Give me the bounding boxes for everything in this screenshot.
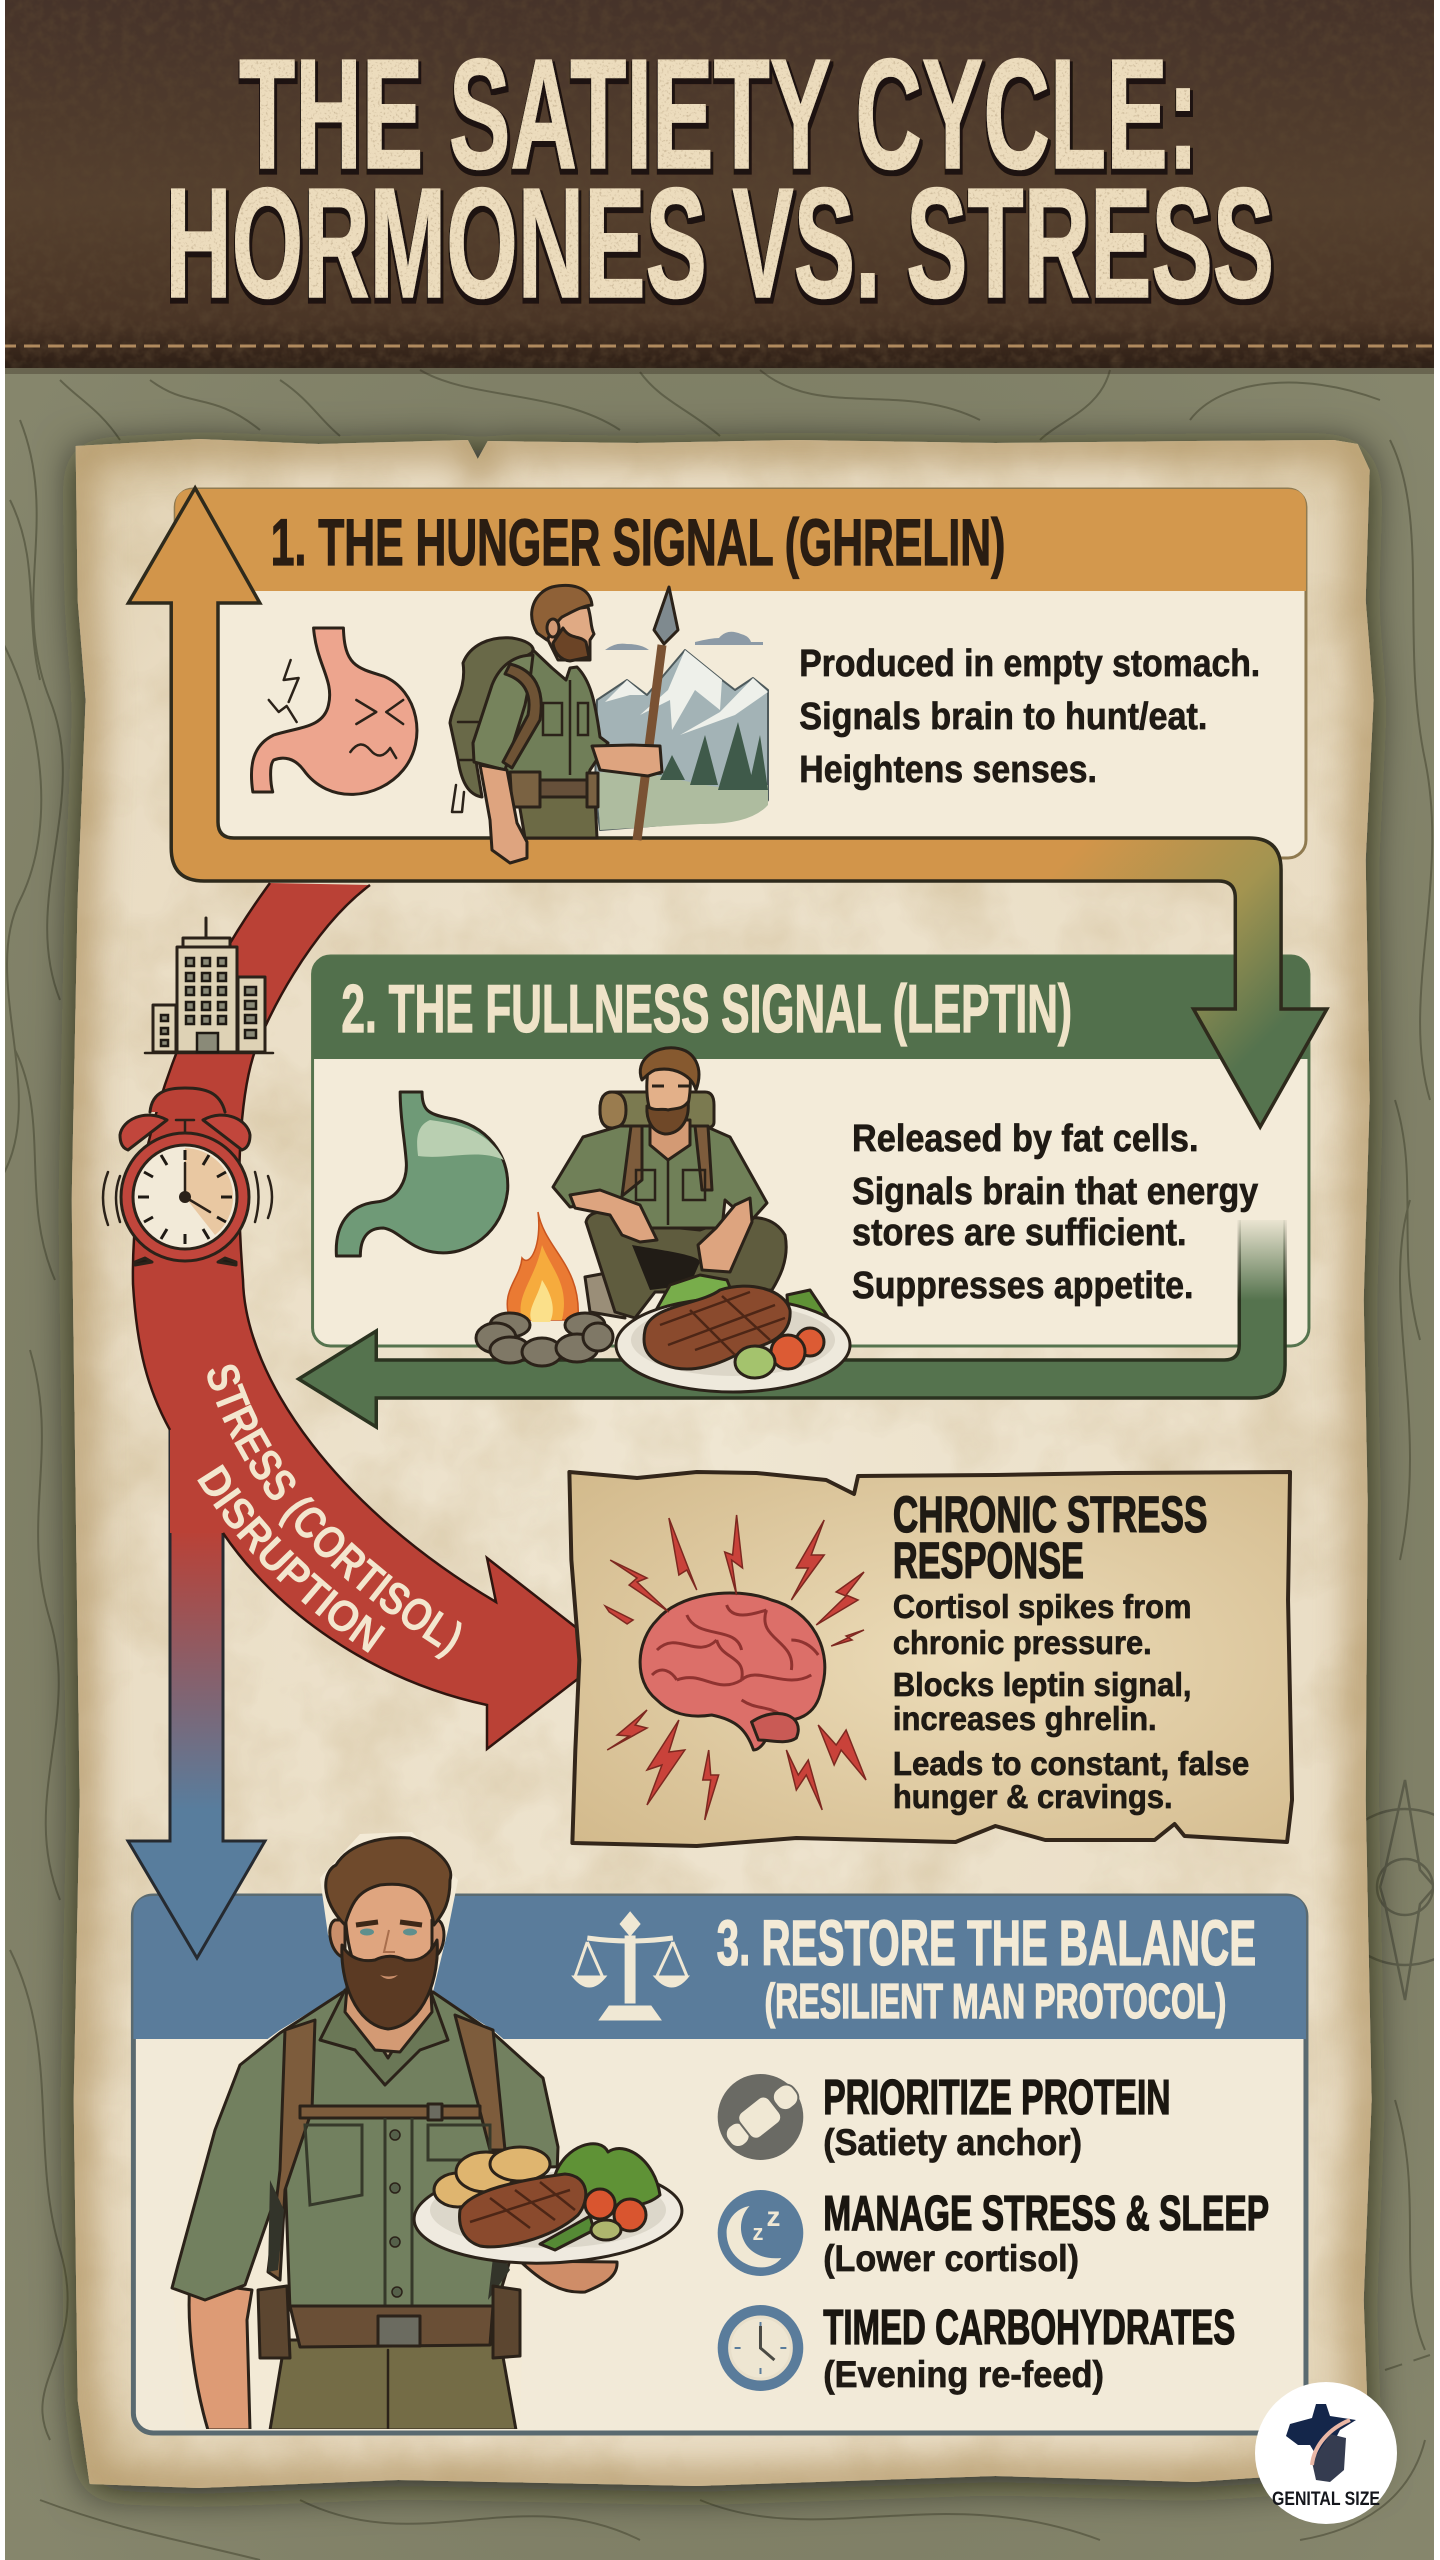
right forearm and hand bbox=[592, 745, 662, 776]
icon: ringing alarm clock bbox=[103, 1088, 272, 1265]
sleeve bbox=[473, 655, 533, 770]
neck and tee bbox=[650, 1120, 690, 1160]
head bbox=[647, 1060, 690, 1132]
rock seat bbox=[585, 1272, 625, 1318]
icon: full green stomach bbox=[336, 1092, 508, 1256]
trousers bbox=[270, 2340, 516, 2430]
body text: stress effects: increases ghrelin. bbox=[893, 1700, 1157, 1737]
hand under plate bbox=[520, 2261, 617, 2292]
icon: moon and sleep: z bbox=[766, 2201, 780, 2232]
trousers bbox=[586, 1212, 786, 1318]
icon: plate of steak by the fire bbox=[616, 1275, 850, 1392]
icon: protein bbox=[718, 2074, 805, 2160]
heading 3 bbox=[717, 1907, 1256, 2029]
trousers bbox=[518, 797, 597, 838]
spear bbox=[637, 645, 662, 840]
eyes bbox=[356, 1922, 422, 1925]
icon: balance scales bbox=[574, 1912, 687, 2020]
header: leather band bbox=[0, 0, 1440, 374]
body text 1 bbox=[799, 643, 1260, 791]
arrow: hunger to fullness loop (orange to green) bbox=[128, 488, 1327, 1127]
heading: chronic stress response: RESPONSE bbox=[893, 1532, 1084, 1589]
title bbox=[165, 27, 1274, 331]
body text 2: Signals brain that energy bbox=[852, 1171, 1258, 1213]
body text: stress effects: chronic pressure. bbox=[893, 1624, 1152, 1661]
illustration: hunter with spear bbox=[450, 585, 678, 863]
body text 2: Released by fat cells. bbox=[852, 1118, 1198, 1160]
salad greens bbox=[555, 2144, 660, 2206]
item: prioritize protein: (Satiety anchor) bbox=[823, 2122, 1082, 2163]
collar and tee bbox=[345, 2035, 423, 2075]
item: timed carbohydrates: TIMED CARBOHYDRATES bbox=[823, 2301, 1235, 2355]
panel: aged parchment sheet bbox=[60, 430, 1384, 2500]
body text 1: Signals brain to hunt/eat. bbox=[799, 696, 1207, 738]
body text 2: stores are sufficient. bbox=[852, 1212, 1187, 1254]
belt and pouches bbox=[510, 780, 597, 797]
panel 2 header band bbox=[313, 956, 1309, 1059]
heading 1: 1. THE HUNGER SIGNAL (GHRELIN) bbox=[271, 505, 1005, 579]
beard bbox=[342, 1940, 437, 2029]
steak bbox=[460, 2174, 586, 2247]
heading: chronic stress response bbox=[893, 1486, 1207, 1589]
badge: genital size logo bbox=[1255, 2382, 1397, 2524]
illustration: man holding plate of food bbox=[172, 1832, 684, 2430]
icon: campfire bbox=[476, 1212, 613, 1366]
shirt bbox=[553, 1126, 767, 1228]
head bbox=[548, 607, 594, 660]
ears bbox=[330, 1920, 444, 1958]
panel: chronic stress response note bbox=[569, 1472, 1292, 1846]
panel 3 header band bbox=[133, 1896, 1306, 2039]
bedroll bbox=[600, 1092, 714, 1128]
plate bbox=[412, 2162, 684, 2268]
backpack bbox=[450, 638, 533, 797]
body text 1: Produced in empty stomach. bbox=[799, 643, 1260, 685]
left forearm and hand bbox=[480, 765, 527, 863]
compass rose remnant bbox=[1327, 1780, 1440, 2000]
icon: torso silhouette bbox=[1286, 2404, 1356, 2482]
potatoes bbox=[434, 2147, 550, 2207]
pouches bbox=[258, 2286, 520, 2358]
dark shirt folds bbox=[268, 2180, 510, 2300]
body text 2 bbox=[852, 1118, 1258, 1307]
body text 2: Suppresses appetite. bbox=[852, 1265, 1193, 1307]
belt bbox=[290, 2306, 493, 2347]
hair bbox=[326, 1838, 451, 1925]
body text: stress effects bbox=[893, 1588, 1249, 1815]
item: timed carbohydrates bbox=[823, 2301, 1235, 2395]
icon: stressed brain bbox=[640, 1593, 825, 1750]
head bbox=[345, 1878, 436, 2000]
arrow: red stress disruption curve bbox=[133, 883, 610, 1749]
item: timed carbohydrates: (Evening re-feed) bbox=[823, 2354, 1104, 2395]
heading: chronic stress response: CHRONIC STRESS bbox=[893, 1486, 1207, 1543]
body text: stress effects: hunger & cravings. bbox=[893, 1778, 1173, 1815]
item: manage stress and sleep bbox=[823, 2187, 1269, 2279]
label: stress cortisol disruption: DISRUPTION bbox=[197, 1464, 386, 1653]
body text: stress effects: Blocks leptin signal, bbox=[893, 1666, 1191, 1703]
straps bbox=[268, 2015, 505, 2280]
forearm bbox=[189, 2282, 252, 2430]
strap bbox=[503, 664, 541, 768]
arrow: blue branch to restore balance bbox=[128, 1420, 265, 1958]
icon: moon and sleep bbox=[718, 2190, 803, 2276]
illustration: seated man with pack bbox=[553, 1048, 786, 1318]
icon: lightning bolts around brain bbox=[605, 1515, 866, 1820]
torso shirt bbox=[505, 650, 608, 782]
neck bbox=[345, 1975, 432, 2052]
halo outline bbox=[268, 1832, 504, 2039]
panel 1 card: hunger signal bbox=[175, 489, 1306, 858]
panel 1 header band bbox=[175, 489, 1306, 591]
forearms and hands bbox=[570, 1190, 657, 1242]
label: stress cortisol disruption: STRESS (CORTISOL) bbox=[207, 1364, 462, 1660]
tomatoes and beans bbox=[585, 2189, 615, 2219]
item: manage stress and sleep: (Lower cortisol) bbox=[823, 2238, 1079, 2279]
panel 3 card: restore the balance bbox=[133, 1896, 1306, 2433]
icon: moon and sleep: z bbox=[753, 2220, 763, 2245]
body text 1: Heightens senses. bbox=[799, 749, 1097, 791]
torso shirt bbox=[172, 1992, 558, 2310]
arrow: fullness return (green, fades in) bbox=[299, 1220, 1285, 1427]
item: prioritize protein bbox=[823, 2071, 1171, 2163]
body text: stress effects: Leads to constant, false bbox=[893, 1745, 1249, 1782]
shirt placket and pockets bbox=[305, 2118, 490, 2308]
illustration: mountain landscape bbox=[595, 632, 768, 830]
icon: clock bbox=[718, 2305, 803, 2391]
icon: angry empty stomach bbox=[251, 628, 417, 794]
badge: genital size logo: GENITAL SIZE bbox=[1272, 2489, 1380, 2510]
icon: office building bbox=[145, 918, 273, 1053]
item: prioritize protein: PRIORITIZE PROTEIN bbox=[823, 2071, 1171, 2125]
panel 2 card: fullness signal bbox=[313, 956, 1309, 1346]
body text: stress effects: Cortisol spikes from bbox=[893, 1588, 1191, 1625]
